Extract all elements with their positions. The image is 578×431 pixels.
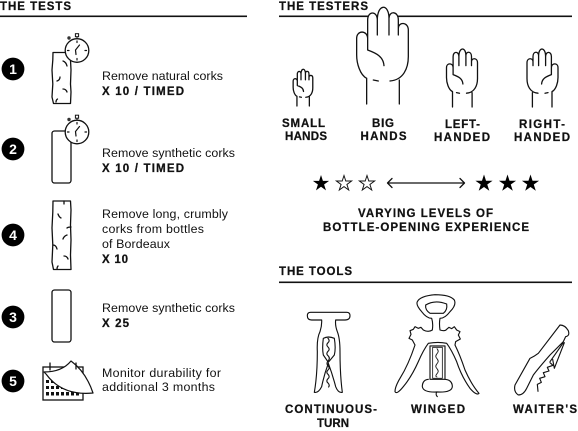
stars: low experience	[313, 175, 375, 190]
text: test 3: Remove synthetic corks	[102, 301, 235, 315]
heading: the tools: THE TOOLS	[279, 266, 352, 278]
caption: varying experience: VARYING LEVELS OF	[358, 208, 493, 220]
text: test 4: X 10	[102, 254, 128, 266]
number badge 1: 1	[9, 61, 17, 77]
number badge 5	[2, 370, 24, 392]
text: test 2: X 10 / TIMED	[102, 163, 184, 175]
label: right-handed: HANDED	[514, 132, 570, 144]
text: test 3: X 25	[102, 318, 130, 330]
label: left-handed	[434, 119, 490, 144]
number badge 3	[2, 306, 24, 328]
test 1: natural corks timed	[2, 34, 223, 104]
label: waiter's: WAITER'S	[513, 404, 577, 416]
number badge 2	[2, 138, 24, 160]
text: test 5: additional 3 months	[102, 380, 215, 394]
text: test 1: X 10 / TIMED	[102, 86, 184, 98]
text: test 2: Remove synthetic corks	[102, 146, 235, 160]
caption: varying experience	[323, 208, 529, 234]
label: right-handed: RIGHT-	[519, 119, 565, 131]
tool: continuous-turn	[285, 312, 377, 430]
icon: big hand	[357, 7, 408, 104]
heading: the testers: THE TESTERS	[279, 1, 368, 13]
label: continuous-turn	[285, 404, 377, 430]
icon: left hand	[446, 49, 478, 107]
text: test 1	[102, 69, 223, 98]
text: test 3	[102, 301, 235, 330]
text: test 2	[102, 146, 235, 175]
label: left-handed: LEFT-	[445, 119, 480, 131]
test 4: long crumbly corks	[2, 201, 229, 270]
label: small hands	[282, 118, 327, 143]
icon: right hand	[527, 49, 558, 107]
text: test 5	[102, 366, 221, 394]
icon: long natural cork	[52, 201, 71, 270]
label: continuous-turn: CONTINUOUS-	[285, 404, 377, 416]
icon: small hand	[293, 69, 313, 106]
tool: winged	[395, 295, 479, 416]
text: test 4: Remove long, crumbly	[102, 207, 229, 221]
tester: right-handed	[514, 49, 570, 144]
caption: varying experience: BOTTLE-OPENING EXPERIENCE	[323, 222, 529, 234]
test 5: monitor durability	[2, 361, 221, 400]
tester: big hands	[357, 7, 408, 143]
text: test 1: Remove natural corks	[102, 69, 223, 83]
heading: the tests: THE TESTS	[0, 1, 71, 13]
icon: synthetic cork with stopwatch	[52, 115, 89, 183]
number badge 3: 3	[9, 309, 17, 325]
number badge 5: 5	[9, 373, 17, 389]
label: big hands	[360, 118, 407, 143]
label: small hands: SMALL	[282, 118, 325, 130]
icon: waiter's corkscrew	[515, 325, 569, 395]
icon: winged corkscrew	[395, 295, 479, 397]
tester: small hands	[282, 69, 327, 143]
text: test 4: of Bordeaux	[102, 237, 171, 251]
number badge 4	[2, 224, 24, 246]
test 3: synthetic corks x 25	[2, 290, 235, 342]
tester: left-handed	[434, 49, 490, 144]
label: big hands: BIG	[372, 118, 394, 130]
test 2: synthetic corks timed	[2, 115, 235, 183]
icon: natural cork with stopwatch	[52, 34, 89, 104]
label: continuous-turn: TURN	[317, 418, 349, 430]
number badge 1	[2, 58, 24, 80]
text: test 5: Monitor durability for	[102, 366, 221, 380]
label: winged: WINGED	[411, 404, 465, 416]
number badge 4: 4	[9, 227, 17, 243]
label: big hands: HANDS	[360, 131, 407, 143]
tool: waiter's	[513, 325, 577, 416]
number badge 2: 2	[9, 141, 17, 157]
icon: synthetic cork	[52, 290, 71, 342]
label: left-handed: HANDED	[434, 132, 490, 144]
icon: calendar with turning page	[43, 361, 93, 400]
arrow: double headed	[388, 178, 464, 188]
label: small hands: HANDS	[285, 131, 327, 143]
label: right-handed	[514, 119, 570, 144]
stars: high experience	[475, 174, 539, 191]
icon: continuous-turn corkscrew	[307, 312, 350, 392]
text: test 4	[102, 207, 229, 266]
experience scale: stars and arrow	[313, 174, 539, 191]
text: test 4: corks from bottles	[102, 222, 204, 236]
